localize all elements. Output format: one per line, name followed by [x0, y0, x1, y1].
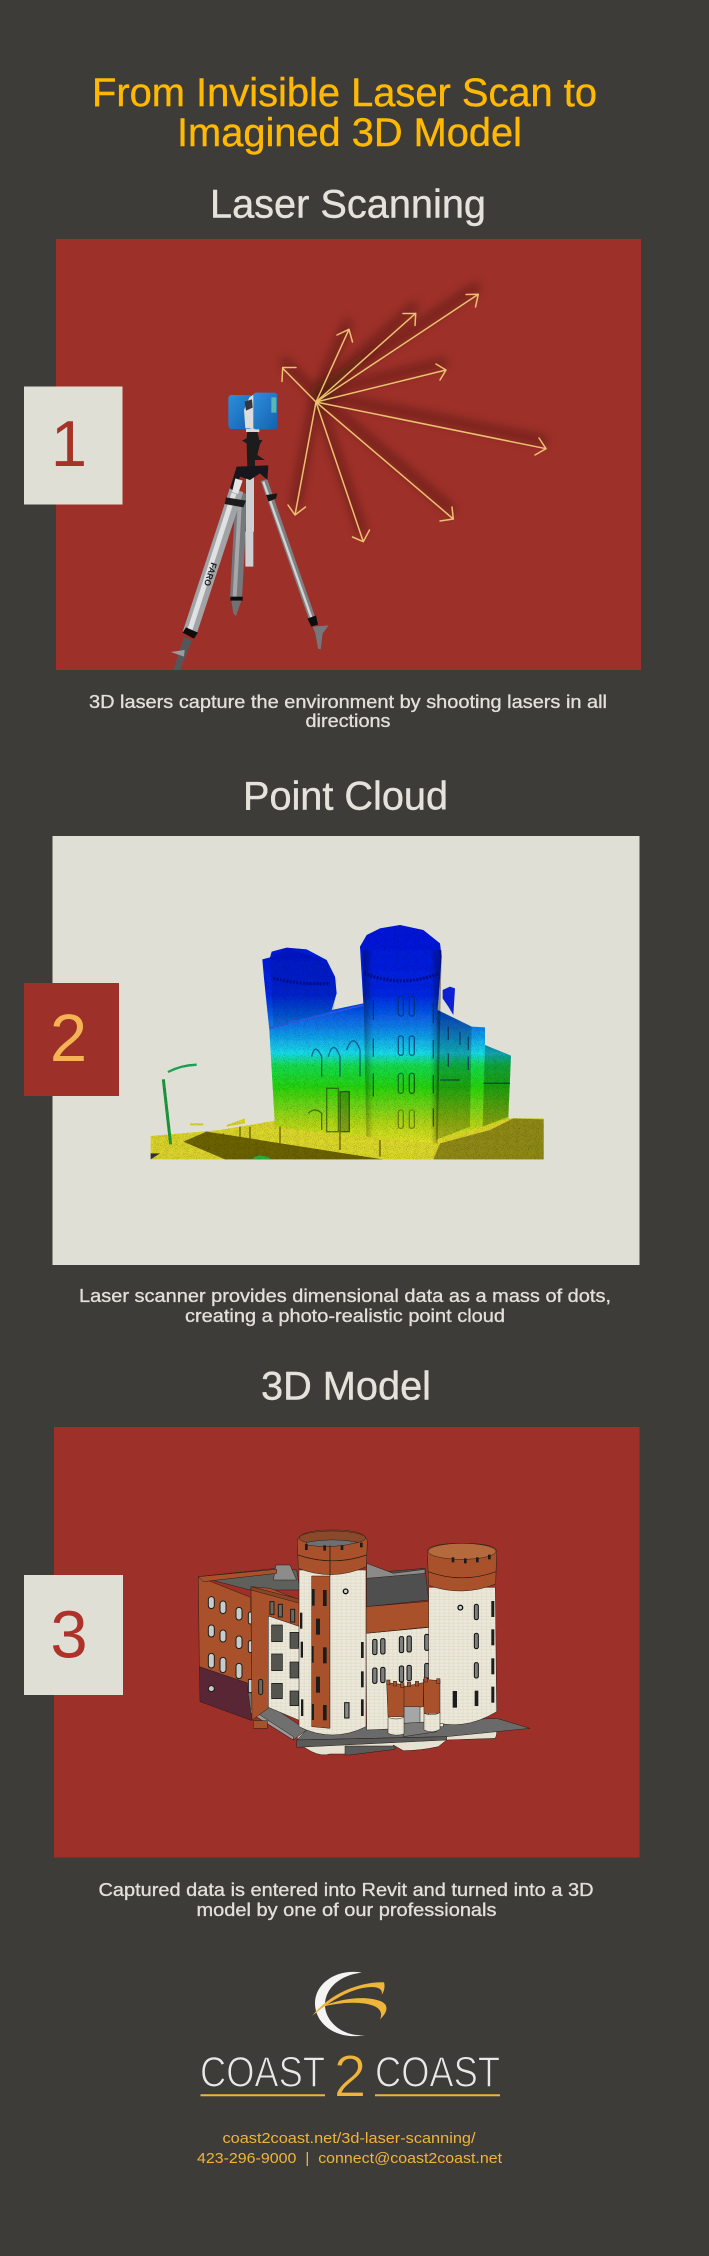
- caption: 3D model: [98, 1880, 594, 1920]
- heading: 3D Model: 3D Model: [261, 1364, 431, 1408]
- centre wall: [366, 1626, 444, 1730]
- windows: [308, 996, 510, 1132]
- caption: 3D model: Captured data is entered into Revit and turned into a 3D: [98, 1880, 594, 1900]
- footer contact details: [197, 2130, 503, 2167]
- left leg: [189, 490, 237, 634]
- wordmark: [200, 2050, 500, 2096]
- centre pole: [245, 477, 254, 567]
- logo: Coast 2 Coast: 2: [334, 2044, 366, 2110]
- number badge 1: 1: [51, 407, 87, 480]
- caption: point cloud: Laser scanner provides dimensional data as a mass of dots,: [79, 1286, 611, 1306]
- base slab: [297, 1718, 530, 1740]
- title: [92, 71, 597, 155]
- number badge 2: [24, 983, 119, 1096]
- caption: 3D model: model by one of our professionals: [196, 1900, 496, 1920]
- back leg: [236, 493, 242, 598]
- laser arrows: [282, 294, 546, 542]
- foundation lumps: [297, 1727, 497, 1755]
- icon: laser scanner on tripod: [171, 393, 329, 670]
- number badge 3: [24, 1575, 123, 1695]
- tripod head: [225, 497, 246, 507]
- right big tower: [429, 1587, 497, 1725]
- title: From Invisible Laser Scan to: [92, 71, 597, 115]
- FARO label: FARO: [202, 561, 219, 588]
- number badge 2: 2: [50, 1001, 87, 1076]
- left big tower: [299, 1570, 366, 1735]
- building silhouette: [262, 925, 511, 1148]
- title: Imagined 3D Model: [177, 111, 522, 155]
- wordmark: COAST: [200, 2050, 325, 2096]
- left wing windows: [208, 1597, 252, 1693]
- right leg: [264, 480, 313, 620]
- wordmark: COAST: [375, 2050, 500, 2096]
- caption: point cloud: creating a photo-realistic point cloud: [185, 1306, 505, 1326]
- number badge 3: 3: [50, 1598, 88, 1672]
- ground: [151, 1118, 544, 1159]
- caption: point cloud: [79, 1286, 611, 1326]
- panel: laser scanning: [56, 239, 641, 670]
- front yellow apron: [253, 1127, 435, 1159]
- icon: crescent and swooshes: [312, 1972, 386, 2036]
- heading: Laser Scanning: Laser Scanning: [210, 182, 486, 226]
- tower shading: [363, 950, 442, 1143]
- scanner body: [246, 428, 259, 432]
- caption: laser scanning: 3D lasers capture the environment by shooting lasers in all: [89, 692, 607, 712]
- white wing: [268, 1616, 300, 1721]
- caption: laser scanning: directions: [306, 711, 390, 731]
- panel: point cloud: [52, 836, 640, 1265]
- footer contact details: coast2coast.net/3d-laser-scanning/: [222, 2130, 476, 2147]
- back roof: [198, 1568, 300, 1590]
- arrow shadows: [283, 286, 546, 534]
- 3D building model: [198, 1530, 530, 1755]
- corner brick turret: [251, 1587, 300, 1720]
- number badge 1: [24, 386, 122, 504]
- ground clutter: [220, 1127, 380, 1157]
- panel: 3D model: [54, 1427, 640, 1858]
- logo: Coast 2 Coast: [200, 1972, 500, 2110]
- lamp post: [163, 1079, 171, 1144]
- footer contact details: 423-296-9000 | connect@coast2coast.net: [197, 2150, 503, 2167]
- caption: laser scanning: [89, 692, 607, 731]
- dark roof and rear parapet: [367, 1568, 429, 1607]
- heading: Point Cloud: Point Cloud: [243, 774, 448, 818]
- left brick wing: [198, 1577, 252, 1685]
- gatehouse: [403, 1683, 423, 1710]
- point cloud building scan: [151, 925, 544, 1159]
